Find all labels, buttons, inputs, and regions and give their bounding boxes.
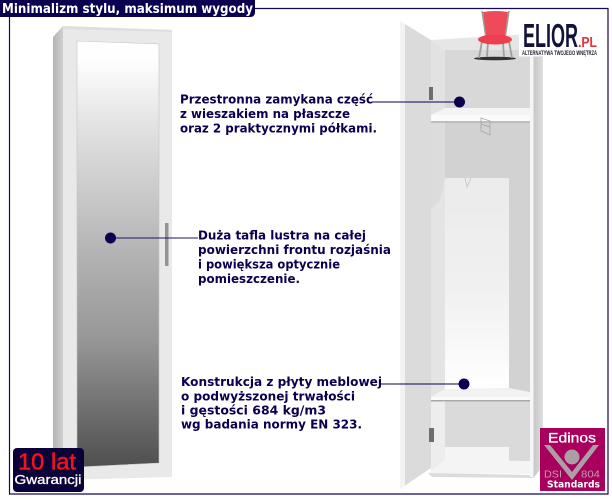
hook <box>465 178 471 187</box>
bottom shelf <box>428 460 530 474</box>
badge: Edinos standards: 804 <box>581 470 600 480</box>
left inner wall shadow <box>431 121 445 210</box>
left inner wall middle <box>431 121 445 397</box>
callout text: Przestronna zamykana część <box>180 92 373 106</box>
callout text <box>180 92 377 136</box>
construction dot <box>458 378 470 390</box>
logo: Elior <box>474 10 607 60</box>
mirror leader line <box>111 237 198 239</box>
mirror text: pomieszczenie. <box>198 272 300 286</box>
upper shelf <box>431 108 530 115</box>
construction leader line <box>381 383 464 385</box>
construction text: o podwyższonej trwałości <box>181 390 355 404</box>
mirror text: i powiększa optycznie <box>198 258 340 272</box>
callout: upper compartment <box>180 92 465 136</box>
door <box>400 21 431 489</box>
left inner wall upper <box>431 40 445 116</box>
badge: Edinos standards <box>540 428 605 491</box>
wardrobe side <box>533 33 543 478</box>
middle shelf <box>431 388 530 398</box>
lower back wall <box>445 400 530 462</box>
handle <box>165 223 168 266</box>
coat hanger rail <box>481 118 490 135</box>
ceiling <box>431 34 530 50</box>
callout: board construction <box>181 375 470 432</box>
mirror <box>77 41 159 467</box>
callout dot <box>454 96 465 108</box>
mirror dot <box>105 232 116 244</box>
left wardrobe: closed with mirror <box>53 26 172 480</box>
hanging section back wall shadow <box>445 122 530 392</box>
badge: Edinos standards: Standards <box>547 480 600 490</box>
callout leader line <box>372 101 460 103</box>
hanging section light panel <box>445 178 509 390</box>
right wardrobe: open <box>400 21 543 489</box>
logo backdrop <box>519 10 607 56</box>
mirror text <box>198 228 391 286</box>
badge: Edinos standards: DSI <box>544 470 562 480</box>
callout text: z wieszakiem na płaszcze <box>180 107 350 121</box>
callout: mirror <box>105 228 391 286</box>
badge: Edinos standards: Edinos <box>548 430 596 446</box>
construction text: i gęstości 684 kg/m3 <box>181 404 326 418</box>
icon: red chair <box>474 11 516 60</box>
left inner wall lower <box>431 400 445 472</box>
callout text: oraz 2 praktycznymi półkami. <box>180 122 377 136</box>
logo suffix: .PL <box>578 34 597 51</box>
upper hinge <box>429 87 433 100</box>
badge: 10 years warranty: Gwarancji <box>14 473 82 487</box>
mirror text: powierzchni frontu rozjaśnia <box>198 243 391 257</box>
construction text: Konstrukcja z płyty meblowej <box>181 375 382 389</box>
construction text <box>181 375 382 432</box>
title bar: Minimalizm stylu, maksimum wygody <box>2 2 253 17</box>
front edge <box>530 33 534 477</box>
badge: 10 years warranty <box>13 448 84 492</box>
badge: 10 years warranty: 10 lat <box>18 448 77 474</box>
lower hinge <box>429 428 434 442</box>
upper back wall <box>445 50 530 110</box>
construction text: wg badania normy EN 323. <box>181 418 362 432</box>
lower light strip <box>445 447 509 461</box>
mirror text: Duża tafla lustra na całej <box>198 228 366 242</box>
